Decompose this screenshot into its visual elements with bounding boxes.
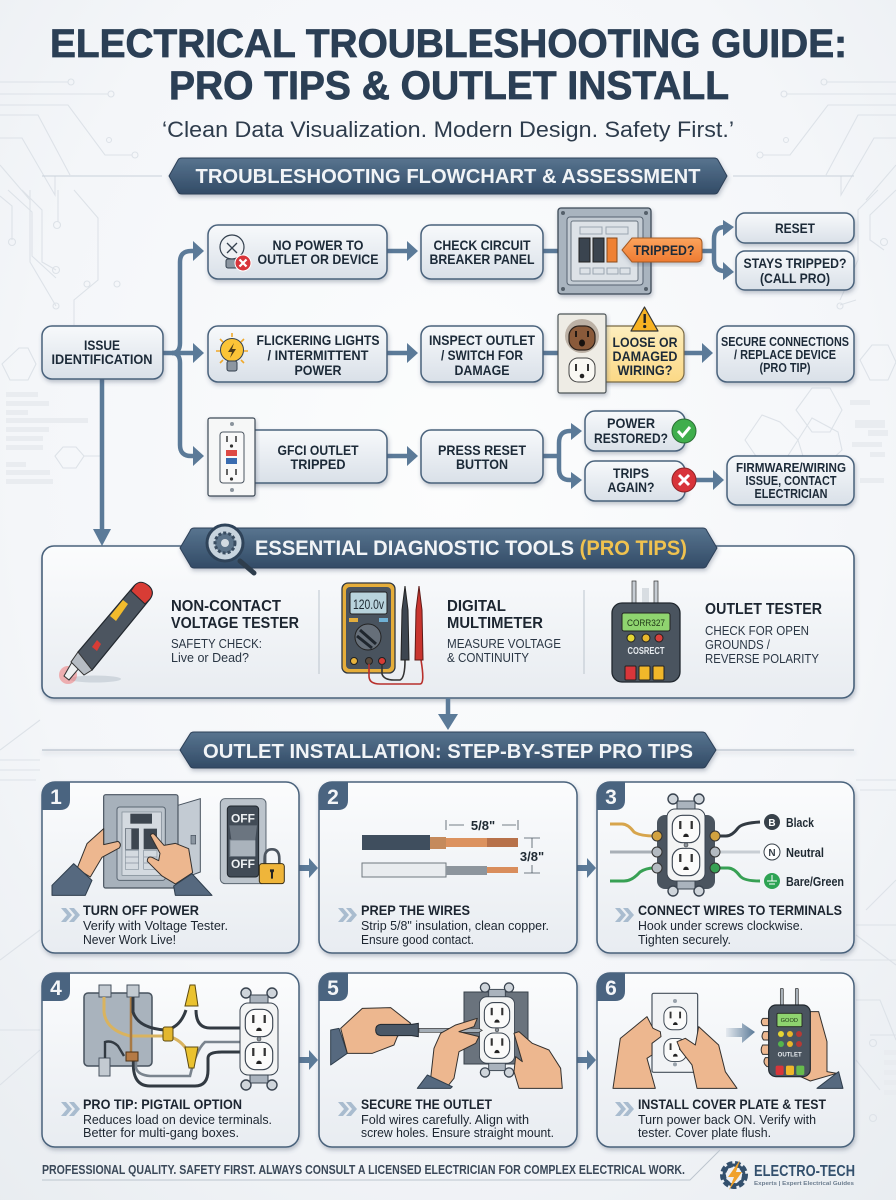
- footer line: [42, 1150, 720, 1180]
- node: firmware wiring: ELECTRICIAN: [754, 486, 828, 501]
- step 5 text: [338, 1096, 554, 1140]
- box: loose or damaged wiring: WIRING?: [618, 362, 672, 378]
- node: no power: [208, 225, 387, 279]
- node: press reset: BUTTON: [456, 456, 508, 472]
- step 5 text: Fold wires carefully. Align with: [361, 1112, 529, 1127]
- subtitle: ‘Clean Data Visualization. Modern Design. Safety First.’: [162, 117, 734, 142]
- icon: bulb with x: [220, 235, 251, 271]
- node: inspect outlet: DAMAGE: [454, 362, 510, 378]
- banner: essential diagnostic tools: ESSENTIAL DIAGNOSTIC TOOLS (PRO TIPS): [255, 537, 687, 560]
- box: loose or damaged wiring: LOOSE OR: [612, 334, 678, 350]
- legend: wire colors: B: [768, 818, 776, 829]
- banner: outlet installation: [42, 732, 854, 768]
- circuit decoration right: [745, 79, 896, 1122]
- node: flickering: FLICKERING LIGHTS: [256, 332, 380, 348]
- illustration: tester in hand: GOOD: [781, 1018, 798, 1024]
- legend: wire colors: N: [768, 848, 776, 859]
- text: outlet tester: CHECK FOR OPEN: [705, 623, 809, 638]
- tool: multimeter: [342, 583, 423, 684]
- node: power restored: [585, 411, 685, 451]
- step 3 text: Hook under screws clockwise.: [638, 918, 803, 933]
- step 1 card: [42, 782, 299, 953]
- node: flickering: / INTERMITTENT: [268, 347, 369, 363]
- banner: troubleshooting flowchart: [169, 158, 727, 194]
- text: outlet tester: OUTLET TESTER: [705, 601, 822, 618]
- step 3 text: Tighten securely.: [638, 932, 731, 947]
- illustration: tester in hand: [761, 988, 843, 1088]
- step 2 text: PREP THE WIRES: [361, 902, 470, 918]
- banner: outlet installation: OUTLET INSTALLATION: STEP-BY-STEP PRO TIPS: [203, 741, 693, 763]
- node: firmware wiring: ISSUE, CONTACT: [746, 473, 837, 488]
- legend: wire colors: [764, 814, 844, 889]
- node: check breaker: CHECK CIRCUIT: [434, 237, 531, 253]
- step 3 card: [597, 782, 854, 953]
- step 2 text: Strip 5/8" insulation, clean copper.: [361, 918, 549, 933]
- step 6 card: [597, 973, 854, 1147]
- icon: magnifier gear: [207, 525, 254, 573]
- illustration: pigtail wiring: [84, 985, 278, 1090]
- node: firmware wiring: [727, 456, 854, 505]
- number 5: 5: [327, 977, 339, 1000]
- banner: essential diagnostic tools: [180, 528, 717, 568]
- node: flickering: POWER: [294, 362, 342, 378]
- number 6: 6: [605, 977, 617, 1000]
- node: no power: NO POWER TO: [272, 237, 364, 253]
- tool: voltage tester: [59, 582, 152, 684]
- icon: breaker panel: [558, 208, 651, 294]
- illustration: off switch and lock: OFF: [231, 857, 255, 871]
- step 3 text: CONNECT WIRES TO TERMINALS: [638, 902, 842, 918]
- node: power restored: POWER: [607, 415, 655, 431]
- step 2 text: Ensure good contact.: [361, 932, 474, 947]
- tag: tripped: TRIPPED?: [634, 242, 694, 258]
- number 6: [597, 973, 625, 1001]
- node: gfci tripped: [240, 430, 387, 483]
- text: non-contact voltage tester: VOLTAGE TESTER: [171, 615, 299, 632]
- step 1 text: Never Work Live!: [83, 932, 176, 947]
- number 3: 3: [605, 786, 617, 809]
- step 1 text: TURN OFF POWER: [83, 902, 199, 918]
- text: non-contact voltage tester: SAFETY CHECK:: [171, 636, 262, 651]
- illustration: off switch and lock: [220, 799, 284, 884]
- node: flickering: [208, 326, 387, 382]
- node: reset: RESET: [775, 220, 815, 236]
- text: digital multimeter: DIGITAL: [447, 598, 506, 615]
- text: outlet tester: REVERSE POLARITY: [705, 651, 819, 666]
- node: press reset: PRESS RESET: [438, 442, 526, 458]
- arrows: flowchart connectors: [93, 220, 734, 546]
- node: reset: [736, 213, 854, 243]
- step 6 text: INSTALL COVER PLATE & TEST: [638, 1096, 826, 1112]
- step 5 text: SECURE THE OUTLET: [361, 1096, 492, 1112]
- logo: Experts | Expert Electrical Guides: [754, 1181, 854, 1187]
- step 4 text: Better for multi-gang boxes.: [83, 1125, 239, 1140]
- step 2 text: [338, 902, 549, 947]
- step 5 text: screw holes. Ensure straight mount.: [361, 1125, 554, 1140]
- icon: burned outlet: [558, 314, 606, 393]
- tool: multimeter: 120.0v: [353, 596, 384, 612]
- number 4: 4: [50, 977, 62, 1000]
- legend: wire colors: Black: [786, 816, 814, 830]
- step 4 text: [61, 1096, 272, 1140]
- node: no power: OUTLET OR DEVICE: [258, 251, 378, 267]
- tool: outlet tester: [612, 581, 680, 682]
- tool: outlet tester: COSRECT: [628, 646, 664, 657]
- illustration: cover plate: [613, 993, 737, 1088]
- text: outlet tester: [705, 601, 822, 666]
- text: digital multimeter: MULTIMETER: [447, 615, 543, 632]
- number 4: [42, 973, 70, 1001]
- number 1: [42, 782, 70, 810]
- title: [50, 22, 847, 108]
- illustration: stripped wires: 3/8": [520, 849, 544, 864]
- node: stays tripped: STAYS TRIPPED?: [744, 255, 846, 271]
- step 4 card: [42, 973, 299, 1147]
- node: trips again: AGAIN?: [608, 479, 654, 495]
- illustration: stripped wires: 5/8": [471, 818, 495, 833]
- title: ELECTRICAL TROUBLESHOOTING GUIDE:: [50, 22, 847, 66]
- text: non-contact voltage tester: NON-CONTACT: [171, 598, 281, 615]
- icon: check: [672, 419, 696, 443]
- step 4 text: Reduces load on device terminals.: [83, 1112, 272, 1127]
- node: gfci tripped: GFCI OUTLET: [278, 442, 359, 458]
- title: PRO TIPS & OUTLET INSTALL: [169, 64, 729, 108]
- data decoration left: [6, 392, 88, 484]
- illustration: stripped wires: [362, 818, 544, 877]
- step 6 text: tester. Cover plate flush.: [638, 1125, 771, 1140]
- number 3: [597, 782, 625, 810]
- panel: diagnostic tools: [42, 546, 854, 698]
- icon: warning triangle: [631, 307, 658, 331]
- node: secure connections: SECURE CONNECTIONS: [721, 334, 849, 349]
- node: inspect outlet: / SWITCH FOR: [441, 347, 523, 363]
- arrow: to tester: [726, 1023, 755, 1043]
- icon: gfci outlet: [208, 418, 255, 496]
- step 4 text: PRO TIP: PIGTAIL OPTION: [83, 1096, 242, 1112]
- step 6 text: Turn power back ON. Verify with: [638, 1112, 816, 1127]
- node: issue identification: IDENTIFICATION: [52, 351, 152, 367]
- legend: wire colors: Bare/Green: [786, 875, 844, 889]
- icon: x: [672, 468, 696, 492]
- illustration: off switch and lock: OFF: [231, 812, 255, 826]
- step 1 text: [61, 902, 228, 947]
- node: firmware wiring: FIRMWARE/WIRING: [736, 460, 846, 475]
- logo: [723, 1160, 855, 1190]
- data decoration right: [850, 400, 896, 1095]
- text: digital multimeter: [447, 598, 561, 665]
- logo: ELECTRO-TECH: [754, 1163, 855, 1180]
- banner side lines: [42, 175, 854, 177]
- node: check breaker: [421, 225, 543, 279]
- node: issue identification: [42, 326, 163, 379]
- number 1: 1: [50, 786, 62, 809]
- node: stays tripped: [736, 251, 854, 290]
- legend: wire colors: Neutral: [786, 846, 824, 860]
- tool: outlet tester: CORR327: [627, 618, 665, 628]
- node: press reset: [421, 430, 543, 483]
- arrows between steps: [299, 858, 596, 1070]
- node: secure connections: [717, 326, 854, 382]
- node: trips again: TRIPS: [613, 465, 649, 481]
- box: loose or damaged wiring: [596, 326, 684, 382]
- text: non-contact voltage tester: Live or Dead?: [171, 650, 249, 665]
- number 2: 2: [327, 786, 339, 809]
- illustration: tester in hand: OUTLET: [778, 1052, 802, 1058]
- text: digital multimeter: MEASURE VOLTAGE: [447, 636, 561, 651]
- step 3 text: [615, 902, 842, 947]
- node: stays tripped: (CALL PRO): [760, 270, 830, 286]
- text: outlet tester: GROUNDS /: [705, 637, 770, 652]
- text: non-contact voltage tester: [171, 598, 299, 665]
- number 2: [319, 782, 348, 810]
- node: power restored: RESTORED?: [594, 430, 668, 446]
- illustration: wired outlet: [610, 794, 760, 896]
- node: gfci tripped: TRIPPED: [290, 456, 346, 472]
- node: trips again: [585, 461, 685, 501]
- step 5 card: [319, 973, 577, 1147]
- banner: troubleshooting flowchart: TROUBLESHOOTING FLOWCHART & ASSESSMENT: [196, 166, 700, 188]
- node: check breaker: BREAKER PANEL: [430, 251, 535, 267]
- step 1 text: Verify with Voltage Tester.: [83, 918, 228, 933]
- node: inspect outlet: [421, 326, 543, 382]
- text: digital multimeter: & CONTINUITY: [447, 650, 529, 665]
- tag: tripped: [622, 238, 702, 262]
- node: issue identification: ISSUE: [84, 337, 120, 353]
- node: secure connections: (PRO TIP): [760, 360, 810, 375]
- illustration: screwing outlet: [331, 983, 562, 1088]
- step 6 text: [615, 1096, 826, 1140]
- node: inspect outlet: INSPECT OUTLET: [429, 332, 535, 348]
- circuit decoration left: [0, 79, 138, 1085]
- number 5: [319, 973, 348, 1001]
- arrow: tools to installation: [438, 698, 458, 730]
- illustration: panel door and hands: [52, 795, 212, 895]
- node: secure connections: / REPLACE DEVICE: [734, 347, 836, 362]
- step 2 card: [319, 782, 577, 953]
- icon: lit bulb: [216, 333, 248, 371]
- footer note: PROFESSIONAL QUALITY. SAFETY FIRST. ALWAYS CONSULT A LICENSED ELECTRICIAN FOR COMPLEX ELECTRICAL WORK.: [42, 1162, 685, 1177]
- box: loose or damaged wiring: DAMAGED: [612, 348, 678, 364]
